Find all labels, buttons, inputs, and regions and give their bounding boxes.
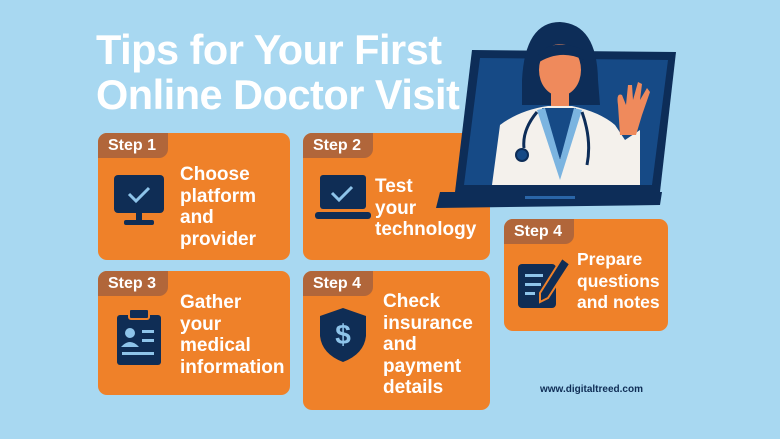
card: step 3 <box>98 271 290 395</box>
tab: step 2: Step 2 <box>313 137 361 154</box>
text: your <box>180 314 221 334</box>
text: payment <box>383 356 461 376</box>
text: insurance <box>383 312 473 334</box>
tab: step 1: Step 1 <box>108 137 156 154</box>
text: medical <box>180 335 251 356</box>
text <box>383 291 473 398</box>
card: step 4 prepare <box>504 219 668 331</box>
text: provider <box>180 228 256 250</box>
text: your <box>375 198 416 218</box>
text: technology <box>375 219 476 240</box>
text: Gather <box>180 292 241 313</box>
footer url: www.digitaltreed.com <box>540 384 643 395</box>
tab: step 4 <box>303 271 373 296</box>
icon: notes pencil <box>518 260 569 308</box>
card: step 4 insurance <box>303 271 490 410</box>
icon: clipboard id <box>117 310 161 365</box>
text <box>180 164 256 250</box>
tab: step 4: Step 4 <box>313 275 361 292</box>
tab: step 2 <box>303 133 373 158</box>
title: Tips for Your First <box>96 26 442 73</box>
text: Choose <box>180 164 250 185</box>
title <box>96 26 460 118</box>
icon: laptop check <box>315 175 371 219</box>
tab: step 1 <box>98 133 168 158</box>
tab: step 3 <box>98 271 168 296</box>
text: and <box>180 207 214 228</box>
card: step 2 <box>303 133 490 260</box>
illustration: doctor on laptop <box>436 22 676 208</box>
tab: step 4: Step 4 <box>514 223 562 240</box>
text: information <box>180 356 284 378</box>
text: details <box>383 377 443 398</box>
text: Test <box>375 176 413 197</box>
text <box>577 249 660 312</box>
card: step 1 <box>98 133 290 260</box>
text: Check <box>383 291 440 312</box>
title: Online Doctor Visit <box>96 71 459 118</box>
text: and notes <box>577 292 660 312</box>
icon: monitor check <box>114 175 164 225</box>
text <box>180 292 284 378</box>
icon: shield dollar: $ <box>335 319 351 350</box>
text: platform <box>180 186 256 206</box>
text: questions <box>577 270 660 290</box>
icon: shield dollar <box>320 308 366 362</box>
text: and <box>383 334 417 355</box>
text <box>375 176 476 240</box>
tab: step 4 <box>504 219 574 244</box>
tab: step 3: Step 3 <box>108 275 156 292</box>
text: Prepare <box>577 249 642 269</box>
